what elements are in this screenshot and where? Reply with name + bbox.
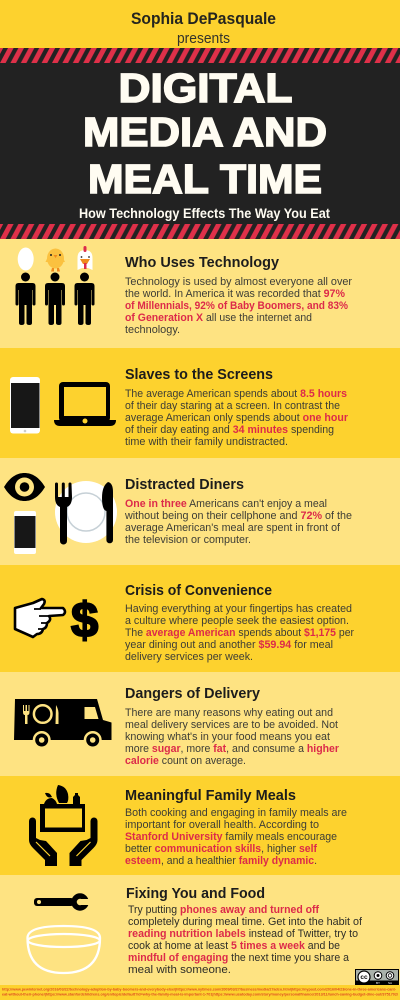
body text: The average American spends about 8.5 hours [125,388,347,400]
body text [125,707,340,767]
body text: One in three Americans can't enjoy a meal [125,498,327,510]
body text: meal with someone. [128,964,231,976]
body text: without being on their cellphone and 72% of the [124,510,352,522]
title: DIGITAL [118,65,292,111]
body text [125,388,349,448]
author name: Sophia DePasquale [131,9,276,28]
heading: Distracted Diners [125,476,244,493]
body text: of their day eating and 34 minutes spending [125,424,334,436]
body text: the world. In America it was recorded that 97% [125,288,345,300]
icon: creative commons badge: SA [388,981,392,985]
heading: Fixing You and Food [126,885,265,902]
body text [124,498,352,546]
panel: meaningful family meals [0,776,400,875]
title banner [0,48,400,239]
icon: hands holding groceries [29,785,98,866]
heading: Who Uses Technology [125,254,280,271]
body text: Try putting phones away and turned off [128,904,319,916]
heading: Slaves to the Screens [125,366,273,383]
body text: technology. [125,324,180,336]
body text: year dining out and another $59.94 for meal [125,639,333,651]
header band [0,0,400,48]
icon: wrench [34,896,91,908]
body text: of Millennials, 92% of Baby Boomers, and 83% [125,300,348,312]
panel: crisis of convenience [0,565,400,672]
icon: creative commons badge [355,969,399,985]
icon: smartphone [10,377,40,434]
body text: delivery services per week. [125,651,253,663]
icon: food truck [14,699,112,749]
icon: creative commons badge: cc [360,974,368,981]
body text: The average American spends about $1,175 per [125,627,354,639]
body text: Stanford University family meals encourage [125,831,337,843]
body text: of Generation X all use the internet and [125,312,312,324]
subtitle: How Technology Effects The Way You Eat [79,206,330,221]
panel: fixing you and food [0,875,400,985]
panel: dangers of delivery [0,672,400,776]
title [83,65,327,202]
body text [125,276,352,336]
panel: who uses technology [0,239,400,348]
body text: mindful of engaging the next time you share a [128,952,350,964]
icon: creative commons badge: BY [376,981,380,985]
heading: Meaningful Family Meals [125,787,296,804]
icon: bowl [28,926,100,973]
footer sources [0,985,400,1000]
body text: time with their family undistracted. [125,436,288,448]
body text: Having everything at your fingertips has created [125,603,352,615]
body text [125,603,354,663]
body text: There are many reasons why eating out and [125,707,333,719]
panel: distracted diners [0,458,400,565]
presents label: presents [177,31,230,47]
icon: egg, chick and chicken over three people [16,246,94,325]
icon: smartphone [14,511,36,554]
body text [125,807,347,867]
footer sources: eat-without-their-phone/|https://www.stanfordchildrens.org/en/topic/default?id=why-the-family-meal-is-important-1-701|https://www.usatoday.com/story/money/personalfinance/2013/11/lunch-saving-budget-dine-out/3751702/ [2,993,399,997]
body text: important for overall health. According to [125,819,319,831]
body text: the television or computer. [125,534,251,546]
body text: reading nutrition labels instead of Twitter, try to [128,928,358,940]
body text: Technology is used by almost everyone all over [125,276,352,288]
icon: eye [4,473,45,501]
body text: meal delivery services are to be avoided. Not [125,719,338,731]
body text: knowing what's in your food means you eat [125,731,330,743]
body text: better communication skills, higher self [125,843,317,855]
icon: dollar sign: $ [71,594,98,648]
body text: completely during meal time. Get into the habit of [128,916,363,928]
body text: more sugar, more fat, and consume a higher [125,743,340,755]
body text: calorie count on average. [125,755,246,767]
title: MEAL TIME [88,156,322,202]
body text: average American's meal are spent in front of [125,522,341,534]
panel: slaves to the screens [0,348,400,458]
icon: plate with fork and knife [55,481,117,545]
footer sources: http://www.pewinternet.org/2016/03/22/technology-adoption-by-baby-boomers-and-everybody-else/|https://www.nytimes.com/2009/03/27/business/media/27adco.html|https://nypost.com/2016/04/23/one-in-three-americans-cant- [2,987,397,991]
icon: laptop [54,382,116,426]
body text: a culture where people seek the easiest option. [125,615,349,627]
body text: cook at home at least 5 times a week and be [128,940,340,952]
heading: Crisis of Convenience [125,582,272,599]
body text: esteem, and a healthier family dynamic. [125,855,317,867]
body text [128,904,363,976]
title: MEDIA AND [83,109,327,155]
body text: Both cooking and engaging in family meals are [125,807,347,819]
body text: of their day staring at a screen. In contrast the [125,400,340,412]
icon: pointing hand [15,599,65,637]
heading: Dangers of Delivery [125,685,261,702]
body text: average American only spends about one hour [125,412,349,424]
